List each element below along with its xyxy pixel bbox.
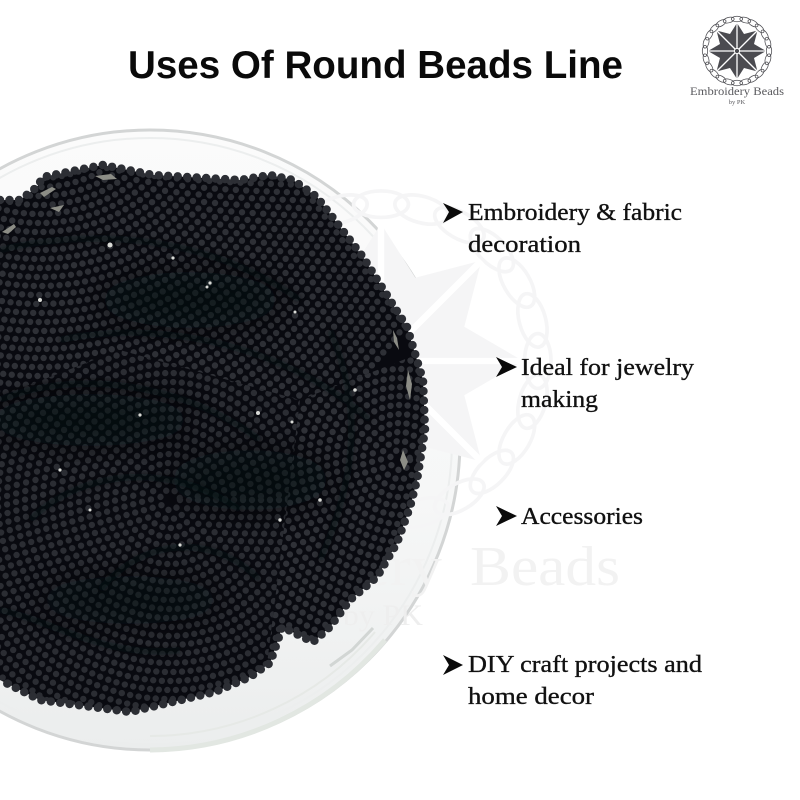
watermark logo: ery bbox=[362, 536, 442, 598]
use item: embroidery and fabric decoration bbox=[443, 200, 682, 258]
title: Uses Of Round Beads Line bbox=[128, 44, 623, 87]
black round beads heap bbox=[0, 160, 430, 716]
use item: jewelry making bbox=[496, 355, 694, 413]
use item: DIY craft projects and home decor: DIY craft projects and bbox=[468, 652, 702, 678]
glass dish bbox=[0, 130, 460, 750]
watermark logo bbox=[210, 190, 620, 632]
use item: DIY craft projects and home decor: home decor bbox=[468, 684, 594, 710]
use item: accessories: Accessories bbox=[521, 504, 643, 530]
logo: Embroidery Beads by PK bbox=[690, 16, 784, 106]
use item: embroidery and fabric decoration: Embroidery & fabric bbox=[468, 200, 682, 226]
use item: jewelry making: Ideal for jewelry bbox=[521, 355, 694, 381]
logo: Embroidery Beads by PK: Embroidery Beads bbox=[690, 84, 784, 98]
use item: embroidery and fabric decoration: decoration bbox=[468, 232, 581, 258]
use item: DIY craft projects and home decor bbox=[443, 652, 702, 710]
watermark logo: Beads bbox=[470, 536, 620, 598]
watermark logo: by PK bbox=[343, 599, 423, 632]
use item: jewelry making: making bbox=[521, 387, 598, 413]
logo: Embroidery Beads by PK: by PK bbox=[729, 99, 746, 106]
